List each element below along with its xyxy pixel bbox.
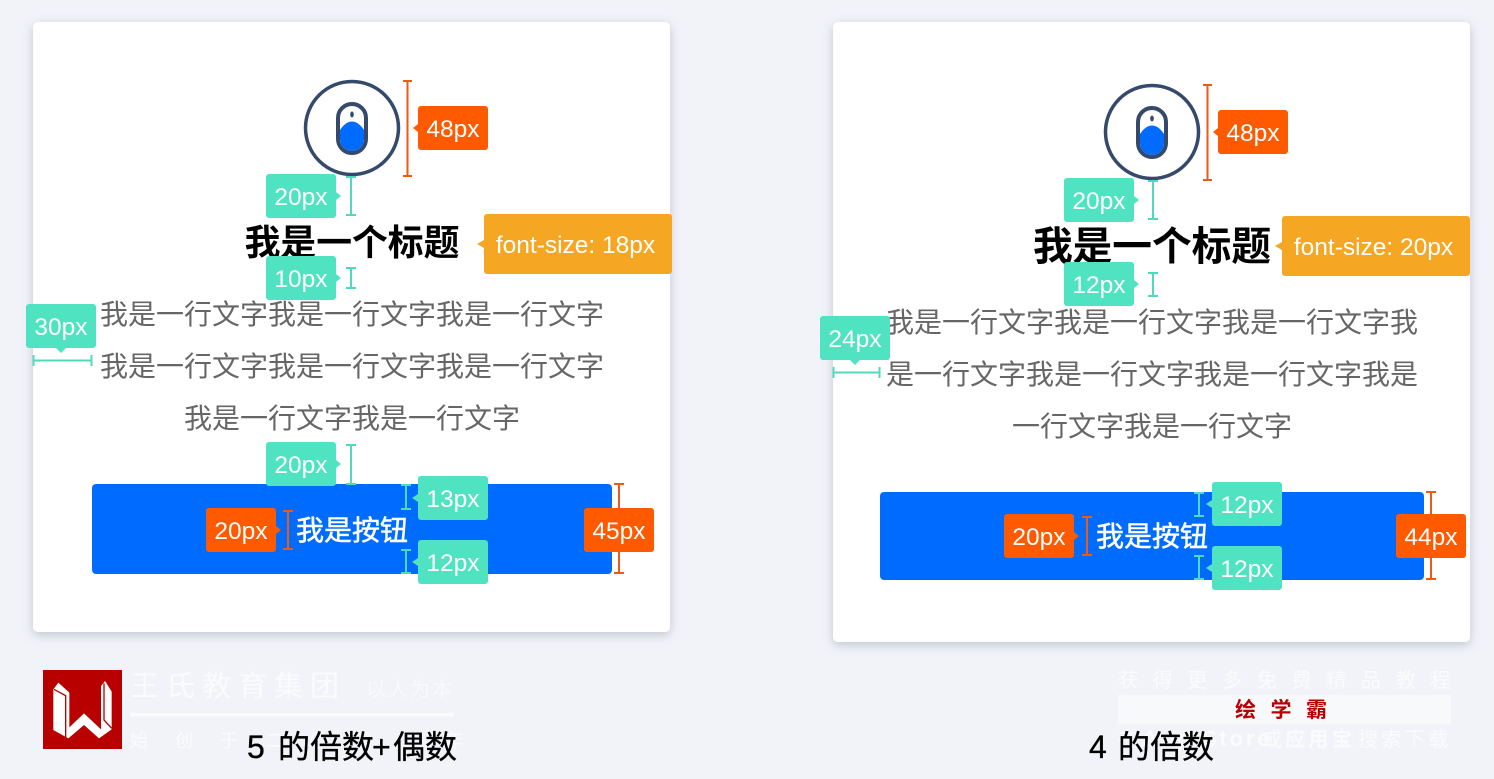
measure: title to text 12px (1064, 262, 1158, 306)
measure: button height 45px: 45px (592, 518, 646, 545)
watermark: app promo: 搜索下载 (1358, 728, 1452, 751)
measure: title to text 10px: 10px (274, 266, 328, 293)
measure: text to button 20px (266, 442, 356, 486)
measure: button top padding 12px (1194, 482, 1282, 526)
icon: mouse in circle (1106, 86, 1198, 178)
title: 我是一个标题 (245, 223, 459, 263)
tag: font-size 18px: font-size: 18px (496, 232, 655, 259)
paragraph text: 是一行文字我是一行文字我是一行文字我是 (886, 359, 1418, 390)
watermark: group name: 始创于二〇〇二年 (130, 731, 490, 751)
panel: left card (26, 22, 672, 632)
measure: icon to title 20px (266, 174, 356, 218)
measure: button text height 20px: 20px (214, 518, 268, 545)
paragraph text: 我是一行文字我是一行文字我是一行文字我 (886, 307, 1418, 338)
caption: left: 5 (247, 729, 265, 765)
watermark: logo (43, 670, 122, 749)
measure: button height 45px (584, 484, 654, 573)
measure: button top padding 12px: 12px (1220, 492, 1274, 519)
watermark: app promo: 应用宝 (1285, 727, 1355, 751)
measure: button bottom padding 12px: 12px (1220, 556, 1274, 583)
paragraph text: 我是一行文字我是一行文字我是一行文字 (100, 299, 604, 330)
paragraph text: 我是一行文字我是一行文字我是一行文字 (100, 351, 604, 382)
measure: title to text 12px: 12px (1072, 272, 1126, 299)
measure: button text height 20px: 20px (1012, 524, 1066, 551)
caption: left: + (372, 729, 391, 765)
caption: right: 的倍数 (1118, 729, 1214, 765)
watermark: app promo: 在 (1118, 728, 1141, 751)
watermark: group name (130, 670, 490, 751)
measure: button text height 20px (206, 508, 293, 552)
tag: font-size 20px: font-size: 20px (1294, 234, 1453, 261)
paragraph text: 一行文字我是一行文字 (1012, 411, 1292, 442)
watermark: group name: 以人为本 (366, 678, 454, 701)
measure: icon height 48px: 48px (426, 116, 480, 143)
measure: button text height 20px (1004, 514, 1092, 558)
measure: button bottom padding 12px (401, 540, 488, 584)
watermark: app promo: App Store (1142, 726, 1272, 751)
measure: title to text 10px (266, 256, 356, 300)
paragraph text (886, 307, 1418, 442)
measure: text to button 20px: 20px (274, 452, 328, 479)
caption: right: 4 (1089, 729, 1107, 765)
watermark: app promo: 或 (1262, 728, 1285, 751)
measure: button height 44px (1396, 492, 1466, 579)
measure: icon to title 20px: 20px (274, 184, 328, 211)
measure: icon to title 20px: 20px (1072, 188, 1126, 215)
caption: left: 偶数 (393, 729, 457, 765)
tag: font-size 18px (477, 214, 672, 274)
measure: side margin 30px (26, 304, 96, 366)
watermark: group name: 王氏教育集团 (130, 670, 346, 703)
tag: font-size 20px (1275, 216, 1470, 276)
measure: icon to title 20px (1064, 178, 1158, 222)
measure: side margin 24px (820, 316, 890, 378)
paragraph text: 我是一行文字我是一行文字 (184, 403, 520, 434)
measure: button top padding 13px (401, 476, 488, 520)
caption: left: 的倍数 (278, 729, 374, 765)
button (92, 484, 612, 574)
measure: button bottom padding 12px: 12px (426, 550, 480, 577)
measure: button top padding 13px: 13px (426, 486, 480, 513)
measure: icon height 48px (403, 81, 488, 176)
panel: right card (820, 22, 1470, 642)
icon: mouse in circle (306, 82, 398, 174)
watermark: app promo: 获得更多免费精品教程 (1118, 669, 1465, 692)
watermark: app promo (1118, 669, 1465, 751)
measure: side margin 30px: 30px (34, 314, 88, 341)
button (880, 492, 1424, 580)
watermark: brand name: 绘学霸 (1235, 698, 1342, 722)
button: 我是按钮 (296, 515, 408, 546)
measure: button bottom padding 12px (1194, 546, 1282, 590)
title: 我是一个标题 (1033, 225, 1271, 269)
measure: button height 44px: 44px (1404, 524, 1458, 551)
measure: icon height 48px: 48px (1226, 120, 1280, 147)
measure: side margin 24px: 24px (828, 326, 882, 353)
button: 我是按钮 (1096, 521, 1208, 552)
paragraph text (100, 299, 604, 434)
measure: icon height 48px (1203, 85, 1288, 180)
